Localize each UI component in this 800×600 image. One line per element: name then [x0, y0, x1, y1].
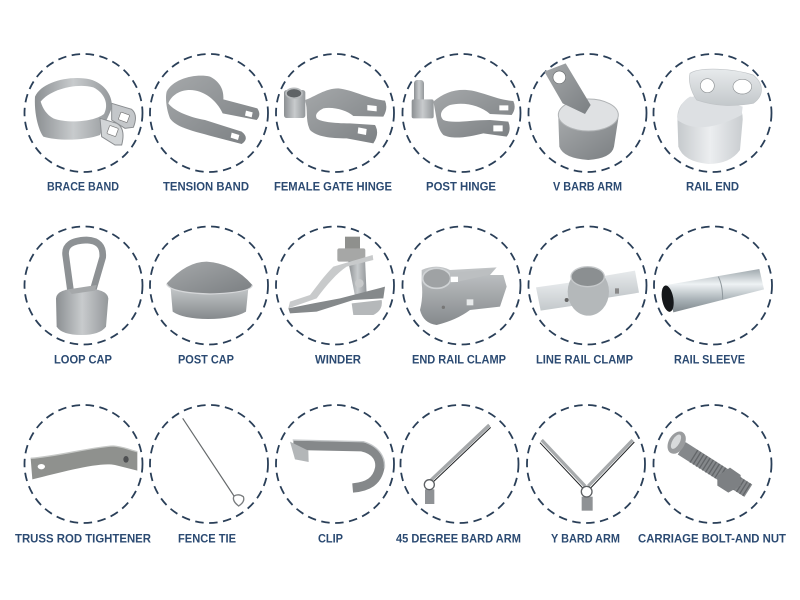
icon: tension band — [166, 76, 259, 144]
dashed circle: truss rod tightener — [24, 405, 142, 523]
panel: brace band — [24, 54, 142, 194]
panel: v barb arm — [528, 54, 646, 194]
label: post hinge: POST HINGE — [426, 182, 496, 194]
label: female gate hinge: FEMALE GATE HINGE — [274, 182, 392, 194]
label: fence tie: FENCE TIE — [178, 534, 236, 546]
label: winder: WINDER — [315, 354, 362, 366]
label: y bard arm: Y BARD ARM — [551, 534, 620, 546]
panel: tension band — [150, 54, 268, 194]
dashed circle: post cap — [150, 226, 268, 344]
label: v barb arm: V BARB ARM — [553, 182, 622, 194]
icon: post hinge — [412, 80, 515, 138]
icon: truss rod tightener — [31, 446, 137, 479]
icon: loop cap — [56, 240, 108, 335]
label: clip: CLIP — [318, 534, 343, 546]
panel: clip — [276, 405, 394, 546]
dashed circle: y bard arm — [527, 405, 645, 523]
dashed circle: 45 degree bard arm — [400, 405, 518, 523]
label: rail end: RAIL END — [686, 182, 739, 194]
label: post cap: POST CAP — [178, 354, 234, 366]
panel: post cap — [150, 226, 268, 366]
panel: truss rod tightener — [15, 405, 152, 546]
icon: y bard arm — [540, 440, 634, 511]
panel: fence tie — [150, 405, 268, 546]
label: brace band: BRACE BAND — [47, 182, 119, 194]
label: tension band: TENSION BAND — [163, 182, 249, 194]
dashed circle: v barb arm — [528, 54, 646, 172]
panel: line rail clamp — [528, 226, 646, 366]
panel: female gate hinge — [274, 54, 394, 194]
panel: 45 degree bard arm — [396, 405, 521, 546]
icon: rail end — [677, 69, 761, 164]
icon: end rail clamp — [420, 267, 507, 325]
icon: rail sleeve — [660, 269, 764, 313]
dashed circle: rail sleeve — [654, 226, 772, 344]
label: 45 degree bard arm: 45 DEGREE BARD ARM — [396, 534, 521, 546]
panel: y bard arm — [527, 405, 645, 546]
panel: winder — [276, 226, 394, 366]
panel: rail sleeve — [654, 226, 772, 366]
dashed circle: loop cap — [24, 226, 142, 344]
label: rail sleeve: RAIL SLEEVE — [674, 354, 745, 366]
icon: brace band — [35, 78, 135, 145]
panel: loop cap — [24, 226, 142, 366]
label: carriage bolt and nut: CARRIAGE BOLT-AND NUT — [638, 534, 786, 546]
dashed circle: female gate hinge — [276, 54, 394, 172]
icon: post cap — [167, 262, 252, 319]
icon: clip — [290, 440, 385, 488]
dashed circle: carriage bolt and nut — [654, 405, 772, 523]
panel: carriage bolt and nut — [638, 405, 786, 546]
dashed circle: fence tie — [150, 405, 268, 523]
dashed circle: winder — [276, 226, 394, 344]
dashed circle: post hinge — [402, 54, 520, 172]
panel: post hinge — [402, 54, 520, 194]
dashed circle: rail end — [654, 54, 772, 172]
dashed circle: tension band — [150, 54, 268, 172]
icon: fence tie — [183, 418, 244, 506]
icon: line rail clamp — [536, 267, 639, 316]
dashed circle: clip — [276, 405, 394, 523]
icon: carriage bolt and nut — [664, 428, 748, 493]
dashed circle: brace band — [24, 54, 142, 172]
label: loop cap: LOOP CAP — [54, 354, 112, 366]
label: end rail clamp: END RAIL CLAMP — [412, 354, 506, 366]
label: truss rod tightener: TRUSS ROD TIGHTENER — [15, 534, 152, 546]
icon: v barb arm — [544, 63, 618, 160]
panel: end rail clamp — [402, 226, 520, 366]
dashed circle: line rail clamp — [528, 226, 646, 344]
dashed circle: end rail clamp — [402, 226, 520, 344]
label: line rail clamp: LINE RAIL CLAMP — [536, 354, 633, 366]
panel: rail end — [654, 54, 772, 194]
icon: 45 degree bard arm — [424, 425, 491, 504]
icon: female gate hinge — [284, 88, 386, 143]
icon: winder — [288, 237, 385, 315]
